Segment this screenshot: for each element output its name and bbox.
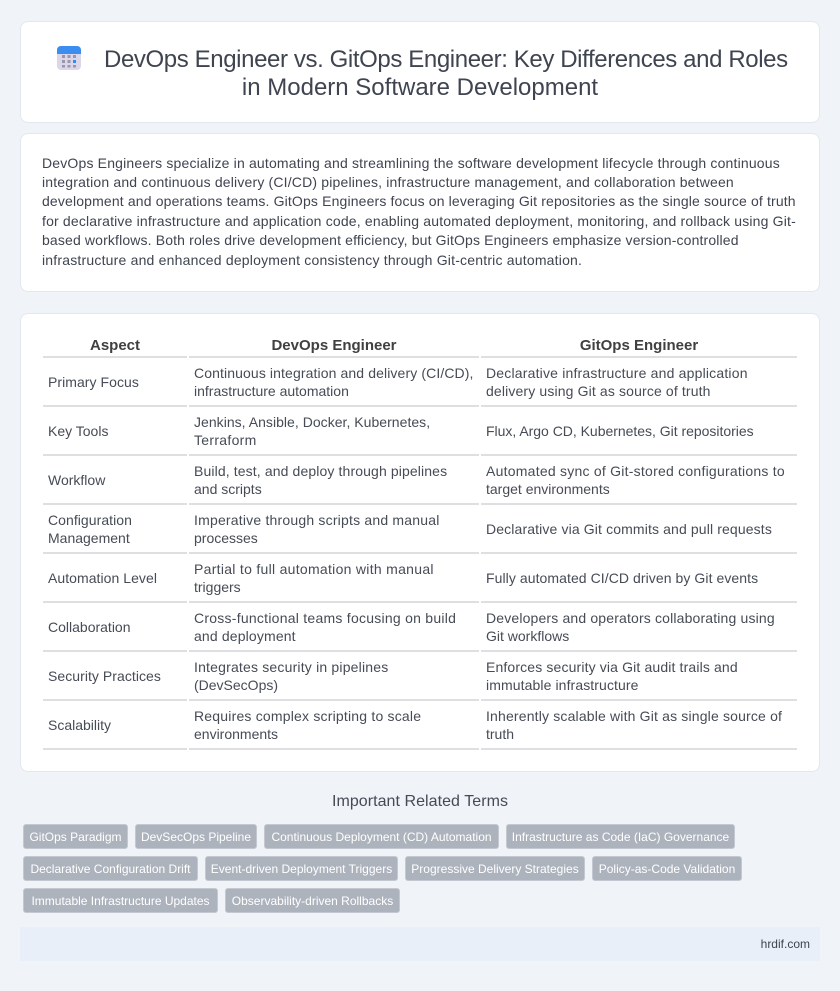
row: scalability: environments xyxy=(194,726,278,742)
header: devops: DevOps Engineer xyxy=(271,337,397,354)
row: key tools: Jenkins, Ansible, Docker, Kubernetes, xyxy=(194,414,430,430)
row: primary focus: delivery using Git as source of truth xyxy=(486,383,711,399)
tags: Continuous Deployment (CD) Automation xyxy=(271,830,492,844)
row: primary focus: infrastructure automation xyxy=(194,383,349,399)
tags: Policy-as-Code Validation xyxy=(599,862,735,876)
tags: DevSecOps Pipeline xyxy=(141,830,251,844)
tags: Event-driven Deployment Triggers xyxy=(211,862,392,876)
row: automation level: Fully automated CI/CD driven by Git events xyxy=(486,570,758,586)
tags: GitOps Paradigm xyxy=(29,830,122,844)
tags: Infrastructure as Code (IaC) Governance xyxy=(512,830,729,844)
row: workflow: Build, test, and deploy through pipelines xyxy=(194,463,447,479)
header: aspect: Aspect xyxy=(90,337,140,354)
row: scalability: Requires complex scripting to scale xyxy=(194,708,421,724)
row: configuration management: processes xyxy=(194,530,258,546)
row: automation level: Partial to full automation with manual xyxy=(194,561,434,577)
row: configuration management: Configuration xyxy=(48,512,132,528)
row: configuration management xyxy=(43,512,797,554)
row: workflow: Automated sync of Git-stored configurations to xyxy=(486,463,785,479)
row: security practices: immutable infrastructure xyxy=(486,677,639,693)
tags: Declarative Configuration Drift xyxy=(30,862,191,876)
row: collaboration: and deployment xyxy=(194,628,296,644)
intro text: development and operations teams. GitOps Engineers focus on leveraging Git repositories as the single source of truth xyxy=(42,193,796,209)
footer bar xyxy=(20,927,820,961)
row: collaboration: Developers and operators collaborating using xyxy=(486,610,775,626)
intro text: for declarative infrastructure and application code, enabling automated deployment, monitoring, and rollback using Git- xyxy=(42,213,796,229)
row: collaboration xyxy=(43,610,797,652)
row: scalability xyxy=(43,708,797,750)
footer text: hrdif.com xyxy=(761,937,810,951)
row: workflow xyxy=(43,463,797,505)
intro text: based workflows. Both roles drive development efficiency, but GitOps Engineers emphasize version-controlled xyxy=(42,232,739,248)
intro text xyxy=(42,154,796,268)
row: workflow: target environments xyxy=(486,481,610,497)
row: security practices: Integrates security in pipelines xyxy=(194,659,388,675)
tags: Observability-driven Rollbacks xyxy=(232,894,393,908)
related terms heading: Important Related Terms xyxy=(332,793,508,810)
row: key tools: Flux, Argo CD, Kubernetes, Git repositories xyxy=(486,423,754,439)
row: workflow: Workflow xyxy=(48,472,105,488)
intro text: integration and continuous delivery (CI/CD) pipelines, infrastructure management, and collaboration between xyxy=(42,174,734,190)
row: automation level: Automation Level xyxy=(48,570,157,586)
table card xyxy=(20,313,820,772)
tags xyxy=(23,824,742,913)
row: security practices xyxy=(43,659,797,701)
intro text: infrastructure and enhanced deployment consistency through Git-centric automation. xyxy=(42,252,582,268)
header: gitops: GitOps Engineer xyxy=(580,337,698,354)
row: primary focus: Declarative infrastructure and application xyxy=(486,365,748,381)
row: security practices: Enforces security via Git audit trails and xyxy=(486,659,738,675)
row: collaboration: Collaboration xyxy=(48,619,130,635)
intro card xyxy=(20,133,820,292)
row: automation level: triggers xyxy=(194,579,241,595)
tags: Immutable Infrastructure Updates xyxy=(31,894,210,908)
row: configuration management: Imperative through scripts and manual xyxy=(194,512,440,528)
intro text: DevOps Engineers specialize in automating and streamlining the software development lifecycle through continuous xyxy=(42,154,780,170)
row: key tools xyxy=(43,414,797,456)
title xyxy=(104,46,788,101)
title: in Modern Software Development xyxy=(242,74,598,101)
header card xyxy=(20,21,820,123)
row: scalability: Scalability xyxy=(48,717,111,733)
table header row xyxy=(43,337,797,358)
row: security practices: (DevSecOps) xyxy=(194,677,278,693)
row: workflow: and scripts xyxy=(194,481,262,497)
row: primary focus: Continuous integration and delivery (CI/CD), xyxy=(194,365,474,381)
row: primary focus: Primary Focus xyxy=(48,374,139,390)
row: automation level xyxy=(43,561,797,603)
row: security practices: Security Practices xyxy=(48,668,161,684)
row: scalability: truth xyxy=(486,726,514,742)
tags: Progressive Delivery Strategies xyxy=(411,862,579,876)
row: configuration management: Declarative via Git commits and pull requests xyxy=(486,521,772,537)
title: DevOps Engineer vs. GitOps Engineer: Key Differences and Roles xyxy=(104,46,788,73)
row: scalability: Inherently scalable with Git as single source of xyxy=(486,708,782,724)
icon: calendar xyxy=(57,46,81,70)
comparison table xyxy=(43,337,797,750)
row: key tools: Terraform xyxy=(194,432,257,448)
row: collaboration: Cross-functional teams focusing on build xyxy=(194,610,456,626)
row: collaboration: Git workflows xyxy=(486,628,569,644)
row: key tools: Key Tools xyxy=(48,423,108,439)
row: configuration management: Management xyxy=(48,530,130,546)
row: primary focus xyxy=(43,365,797,407)
